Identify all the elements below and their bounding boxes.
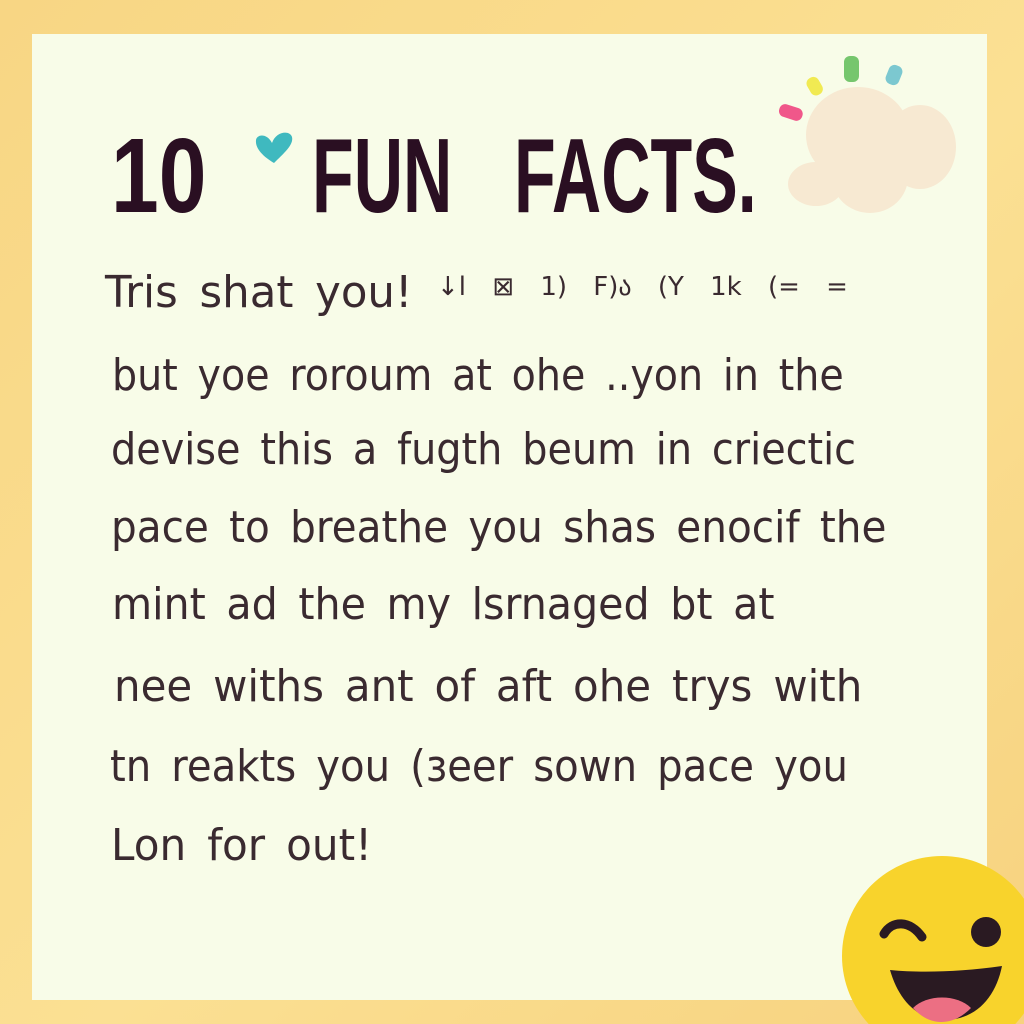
line 1: Tris shat you! [105,267,412,318]
line 1 symbols: ↓l ⊠ 1) F)ა (Y 1k (= = [437,272,848,302]
line 7: tn reakts you (зeer sown pace you [110,741,848,792]
line 8: Lon for out! [111,820,372,871]
title [111,115,757,235]
line 4: pace to breathe you shas enocif the [111,502,886,553]
line 3: devise this a fugth beum in criectic [111,424,856,475]
line 5: mint ad the my lsrnaged bt at [112,579,774,630]
title word: 10: 10 [111,115,206,235]
icon: heart [256,132,292,163]
title word: fun: FUN [312,115,452,235]
line 2: but yoe roroum at ohe ..yon in the [112,350,844,401]
title word: facts: FACTS. [514,115,757,235]
icon: cloud with sparks [779,56,956,213]
line 6: nee withs ant of aft ohe trys with [114,661,862,712]
icon: winking smiley [842,856,1024,1024]
text block: body lines [104,267,886,871]
